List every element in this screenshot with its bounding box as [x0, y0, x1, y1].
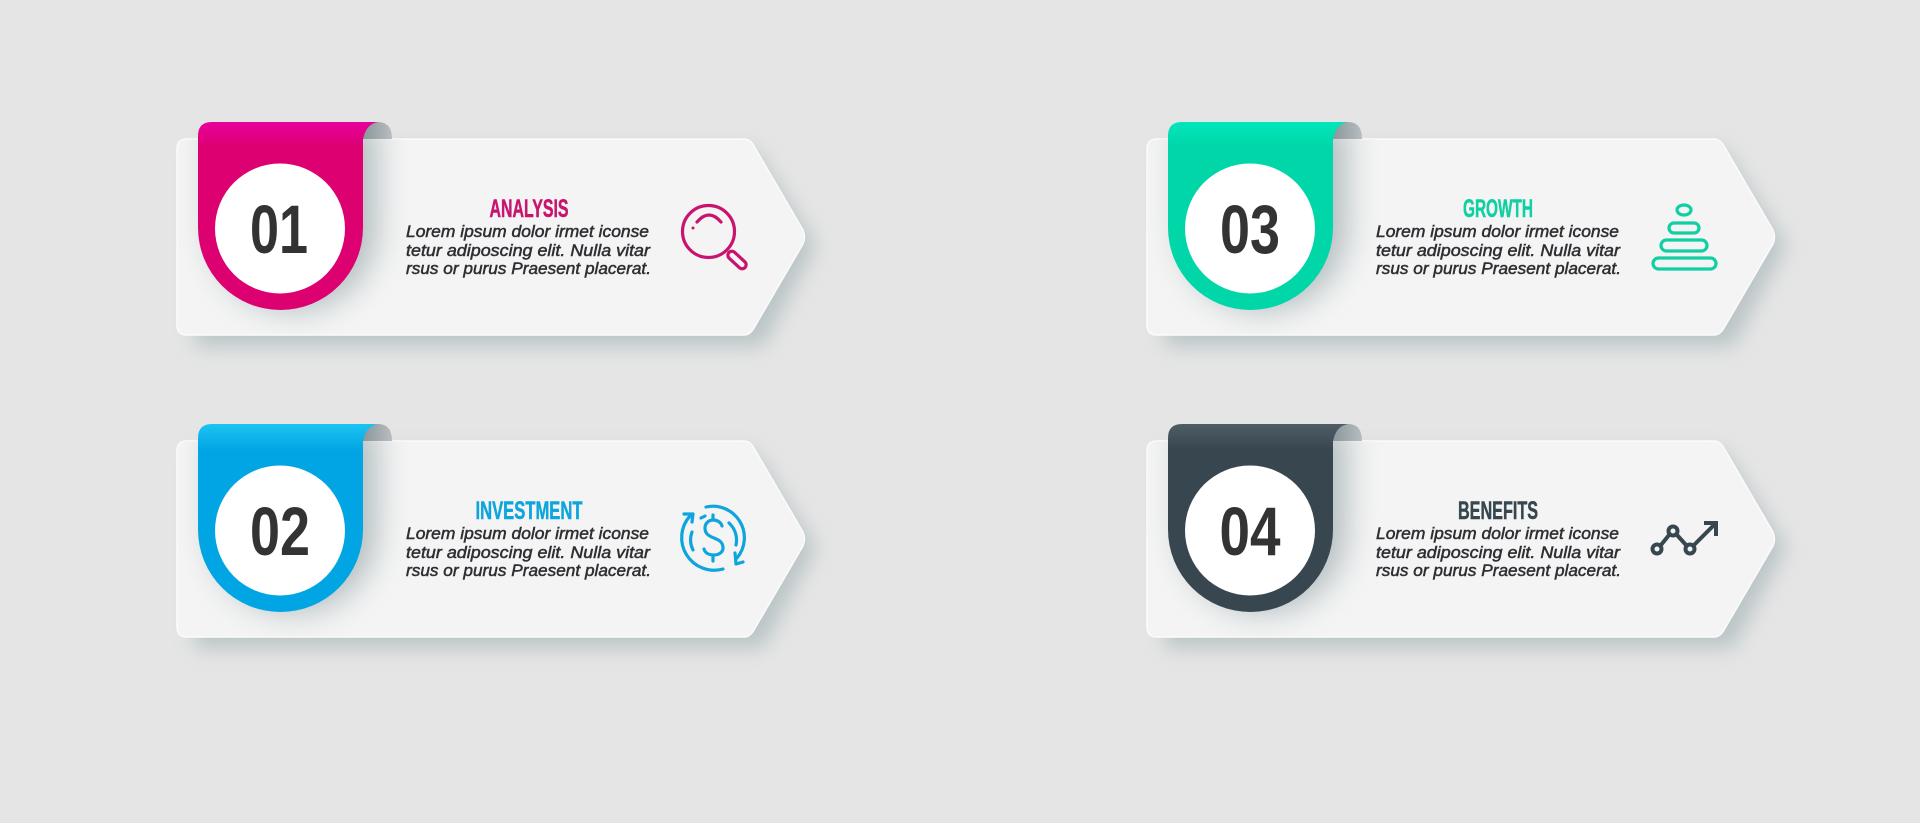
number circle [215, 466, 345, 596]
ribbon shadow [1182, 122, 1346, 310]
card shadow [1165, 452, 1786, 648]
ribbon [1168, 424, 1348, 612]
text block: tetur adiposcing elit. Nulla vitar [406, 543, 651, 562]
text block [406, 524, 651, 580]
text block: rsus or purus Praesent placerat. [1376, 259, 1621, 278]
text block: rsus or purus Praesent placerat. [406, 259, 651, 278]
ribbon fold [360, 424, 392, 441]
icon: magnifier [682, 206, 748, 270]
ribbon shadow [1182, 424, 1346, 612]
ribbon fold [1330, 122, 1362, 139]
heading: GROWTH [1463, 195, 1533, 223]
number circle [215, 164, 345, 294]
number: 01 [250, 191, 308, 268]
number: 04 [1220, 493, 1280, 570]
text block [406, 222, 651, 278]
ribbon [1168, 122, 1348, 310]
card shadow [1165, 150, 1786, 346]
ribbon fold [360, 122, 392, 139]
heading: INVESTMENT [476, 497, 582, 525]
ribbon [198, 122, 378, 310]
heading: BENEFITS [1458, 497, 1538, 525]
panel: 02 investment [177, 424, 816, 648]
ribbon shadow [212, 122, 376, 310]
panel: 01 analysis [177, 122, 816, 346]
text block: Lorem ipsum dolor irmet iconse [1376, 524, 1619, 543]
text block: Lorem ipsum dolor irmet iconse [406, 222, 649, 241]
ribbon shadow [212, 424, 376, 612]
text block [1376, 524, 1621, 580]
text block [1376, 222, 1621, 278]
text block: Lorem ipsum dolor irmet iconse [1376, 222, 1619, 241]
arrow card [1147, 139, 1774, 335]
text block: Lorem ipsum dolor irmet iconse [406, 524, 649, 543]
arrow card [177, 441, 804, 637]
text block: tetur adiposcing elit. Nulla vitar [1376, 241, 1621, 260]
card shadow [195, 150, 816, 346]
arrow card [1147, 441, 1774, 637]
text block: rsus or purus Praesent placerat. [406, 561, 651, 580]
number circle [1185, 466, 1315, 596]
ribbon [198, 424, 378, 612]
card shadow [195, 452, 816, 648]
heading: ANALYSIS [490, 195, 568, 223]
number: 02 [250, 493, 310, 570]
text block: tetur adiposcing elit. Nulla vitar [1376, 543, 1621, 562]
ribbon fold [1330, 424, 1362, 441]
icon: dollar cycle [682, 506, 744, 570]
text block: rsus or purus Praesent placerat. [1376, 561, 1621, 580]
text block: tetur adiposcing elit. Nulla vitar [406, 241, 651, 260]
icon: stacked pyramid [1653, 205, 1716, 269]
number circle [1185, 164, 1315, 294]
icon: trend arrow [1652, 523, 1716, 554]
arrow card [177, 139, 804, 335]
number: 03 [1220, 191, 1280, 268]
panel: 04 benefits [1147, 424, 1786, 648]
panel: 03 growth [1147, 122, 1786, 346]
